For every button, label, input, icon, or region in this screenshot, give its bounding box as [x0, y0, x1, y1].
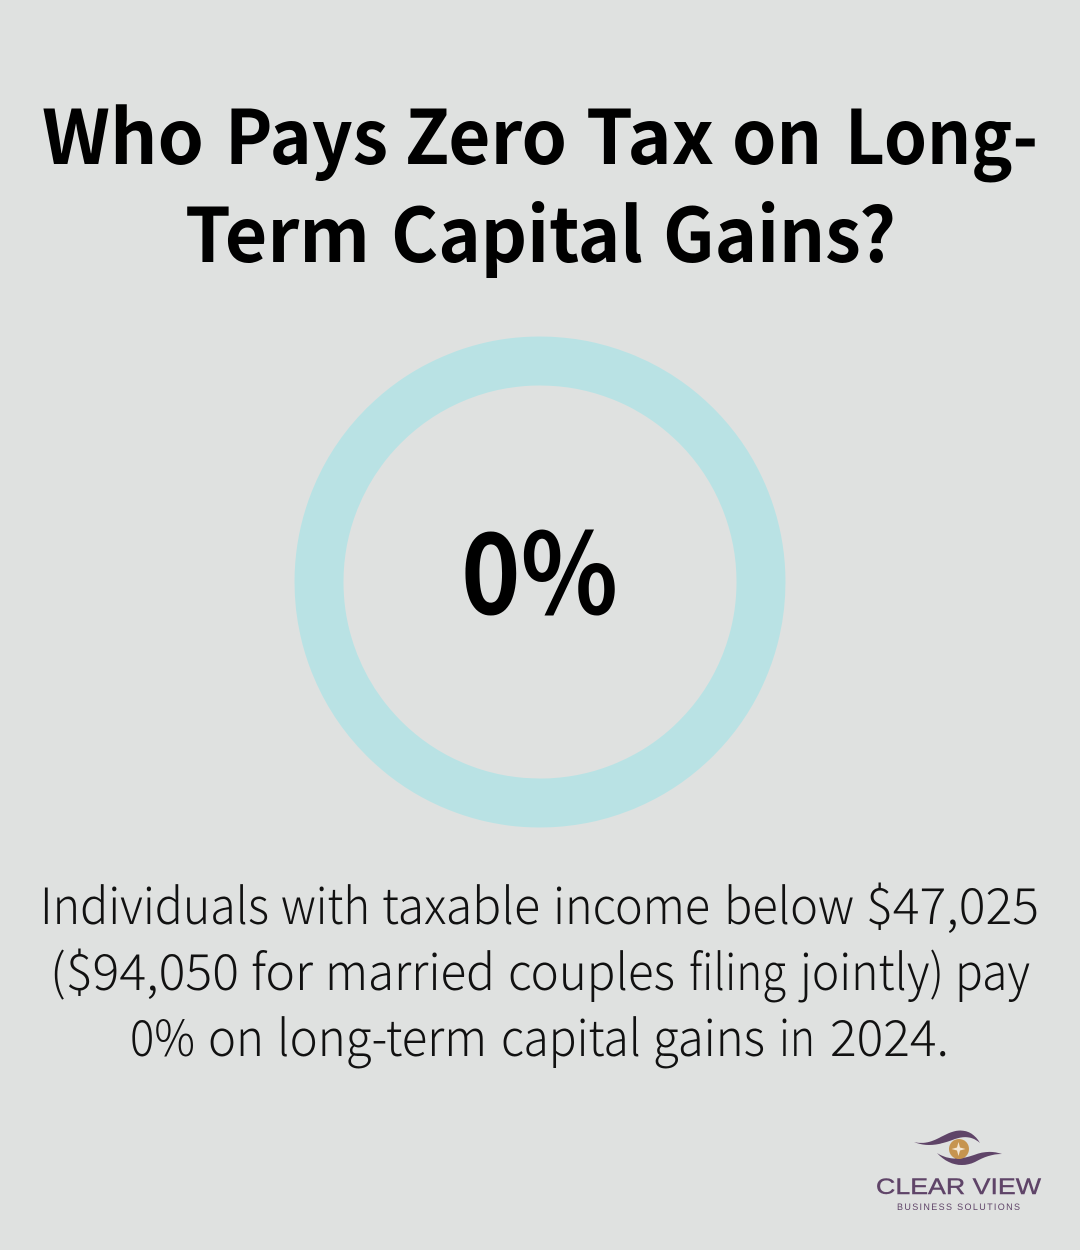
- title: Who: [42, 77, 204, 186]
- title: [42, 77, 1038, 284]
- title: Gains?: [663, 175, 896, 284]
- title: on: [732, 77, 822, 186]
- description text: with: [281, 867, 370, 939]
- icon: eye lower lid: [937, 1152, 1002, 1165]
- description text: couples: [508, 933, 675, 1005]
- description text: below: [724, 867, 854, 939]
- description text: gains: [653, 999, 765, 1071]
- title: Zero: [405, 77, 567, 186]
- description text: Individuals: [40, 867, 269, 939]
- description text: filing: [689, 933, 786, 1005]
- title: Capital: [391, 175, 643, 284]
- description text: [40, 867, 1039, 1071]
- center value: 0%: [461, 485, 618, 647]
- description text: 0%: [130, 999, 195, 1071]
- icon: star: [952, 1142, 966, 1156]
- description text: taxable: [382, 867, 540, 939]
- donut ring: [319, 361, 761, 803]
- icon: eye upper lid: [914, 1130, 980, 1145]
- description text: pay: [955, 933, 1030, 1005]
- description text: on: [208, 999, 264, 1071]
- logo: Clear View Business Solutions: [876, 1130, 1041, 1212]
- description text: $47,025: [866, 867, 1039, 939]
- logo wordmark: CLEAR VIEW: [876, 1174, 1041, 1199]
- description text: 2024.: [830, 999, 949, 1071]
- title: Tax: [586, 77, 714, 186]
- description text: in: [779, 999, 815, 1071]
- description text: capital: [501, 999, 641, 1071]
- description text: jointly): [798, 933, 944, 1005]
- icon: gold iris: [949, 1139, 969, 1159]
- description text: income: [553, 867, 710, 939]
- title: Term: [185, 175, 370, 284]
- description text: married: [325, 933, 495, 1005]
- description text: for: [251, 933, 314, 1005]
- title: Pays: [225, 77, 388, 186]
- logo tagline: BUSINESS SOLUTIONS: [897, 1202, 1020, 1212]
- description text: long-term: [277, 999, 487, 1071]
- description text: ($94,050: [50, 933, 239, 1005]
- title: Long-: [845, 77, 1038, 186]
